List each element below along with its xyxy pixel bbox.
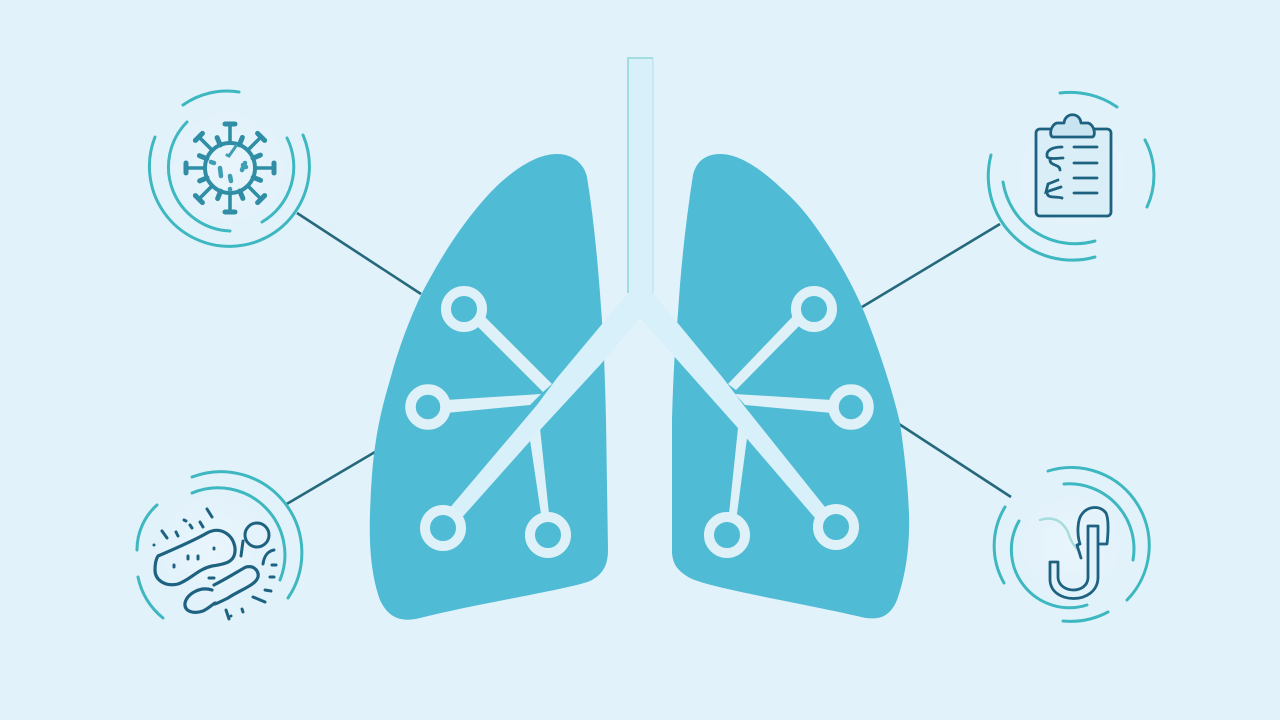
connector: bacteria to lung xyxy=(285,452,375,505)
catheter faded tube xyxy=(1040,518,1080,552)
bacteria rod xyxy=(185,567,258,612)
catheter hook tube xyxy=(1050,526,1098,599)
left branch: upper node xyxy=(446,291,552,392)
right branch: upper node xyxy=(728,291,832,390)
connector: catheter to lung xyxy=(899,424,1011,497)
airway: trachea and bronchi xyxy=(410,58,868,553)
icon: virus xyxy=(149,91,309,246)
catheter cuff xyxy=(1077,507,1108,558)
virus body xyxy=(186,124,274,212)
right branch: middle node xyxy=(735,390,868,424)
bacteria small circle xyxy=(245,523,269,547)
bacteria capsule xyxy=(155,530,235,585)
bacteria rings xyxy=(137,472,302,618)
right lung xyxy=(672,154,909,618)
left lung xyxy=(370,154,608,620)
bacteria specks xyxy=(154,509,276,619)
virus inner marks xyxy=(211,146,246,190)
right branch: lower inner node xyxy=(709,428,747,553)
clipboard handwritten marks xyxy=(1046,147,1063,198)
clipboard lines xyxy=(1074,147,1097,193)
connector: virus to lung xyxy=(297,213,421,294)
virus rings xyxy=(149,91,309,246)
left branch: lower outer node xyxy=(425,510,461,546)
icon: bacteria xyxy=(137,472,302,619)
connector: clipboard to lung xyxy=(862,224,1000,307)
catheter rings xyxy=(994,467,1149,621)
right branch: lower outer node xyxy=(818,509,854,545)
icon: catheter hook xyxy=(994,467,1149,621)
icon: clipboard xyxy=(988,92,1154,260)
clipboard rings xyxy=(988,92,1154,260)
clipboard board xyxy=(1036,129,1111,216)
left branch: lower inner node xyxy=(530,428,566,553)
clipboard clip xyxy=(1051,115,1094,137)
left branch: middle node xyxy=(410,390,541,424)
